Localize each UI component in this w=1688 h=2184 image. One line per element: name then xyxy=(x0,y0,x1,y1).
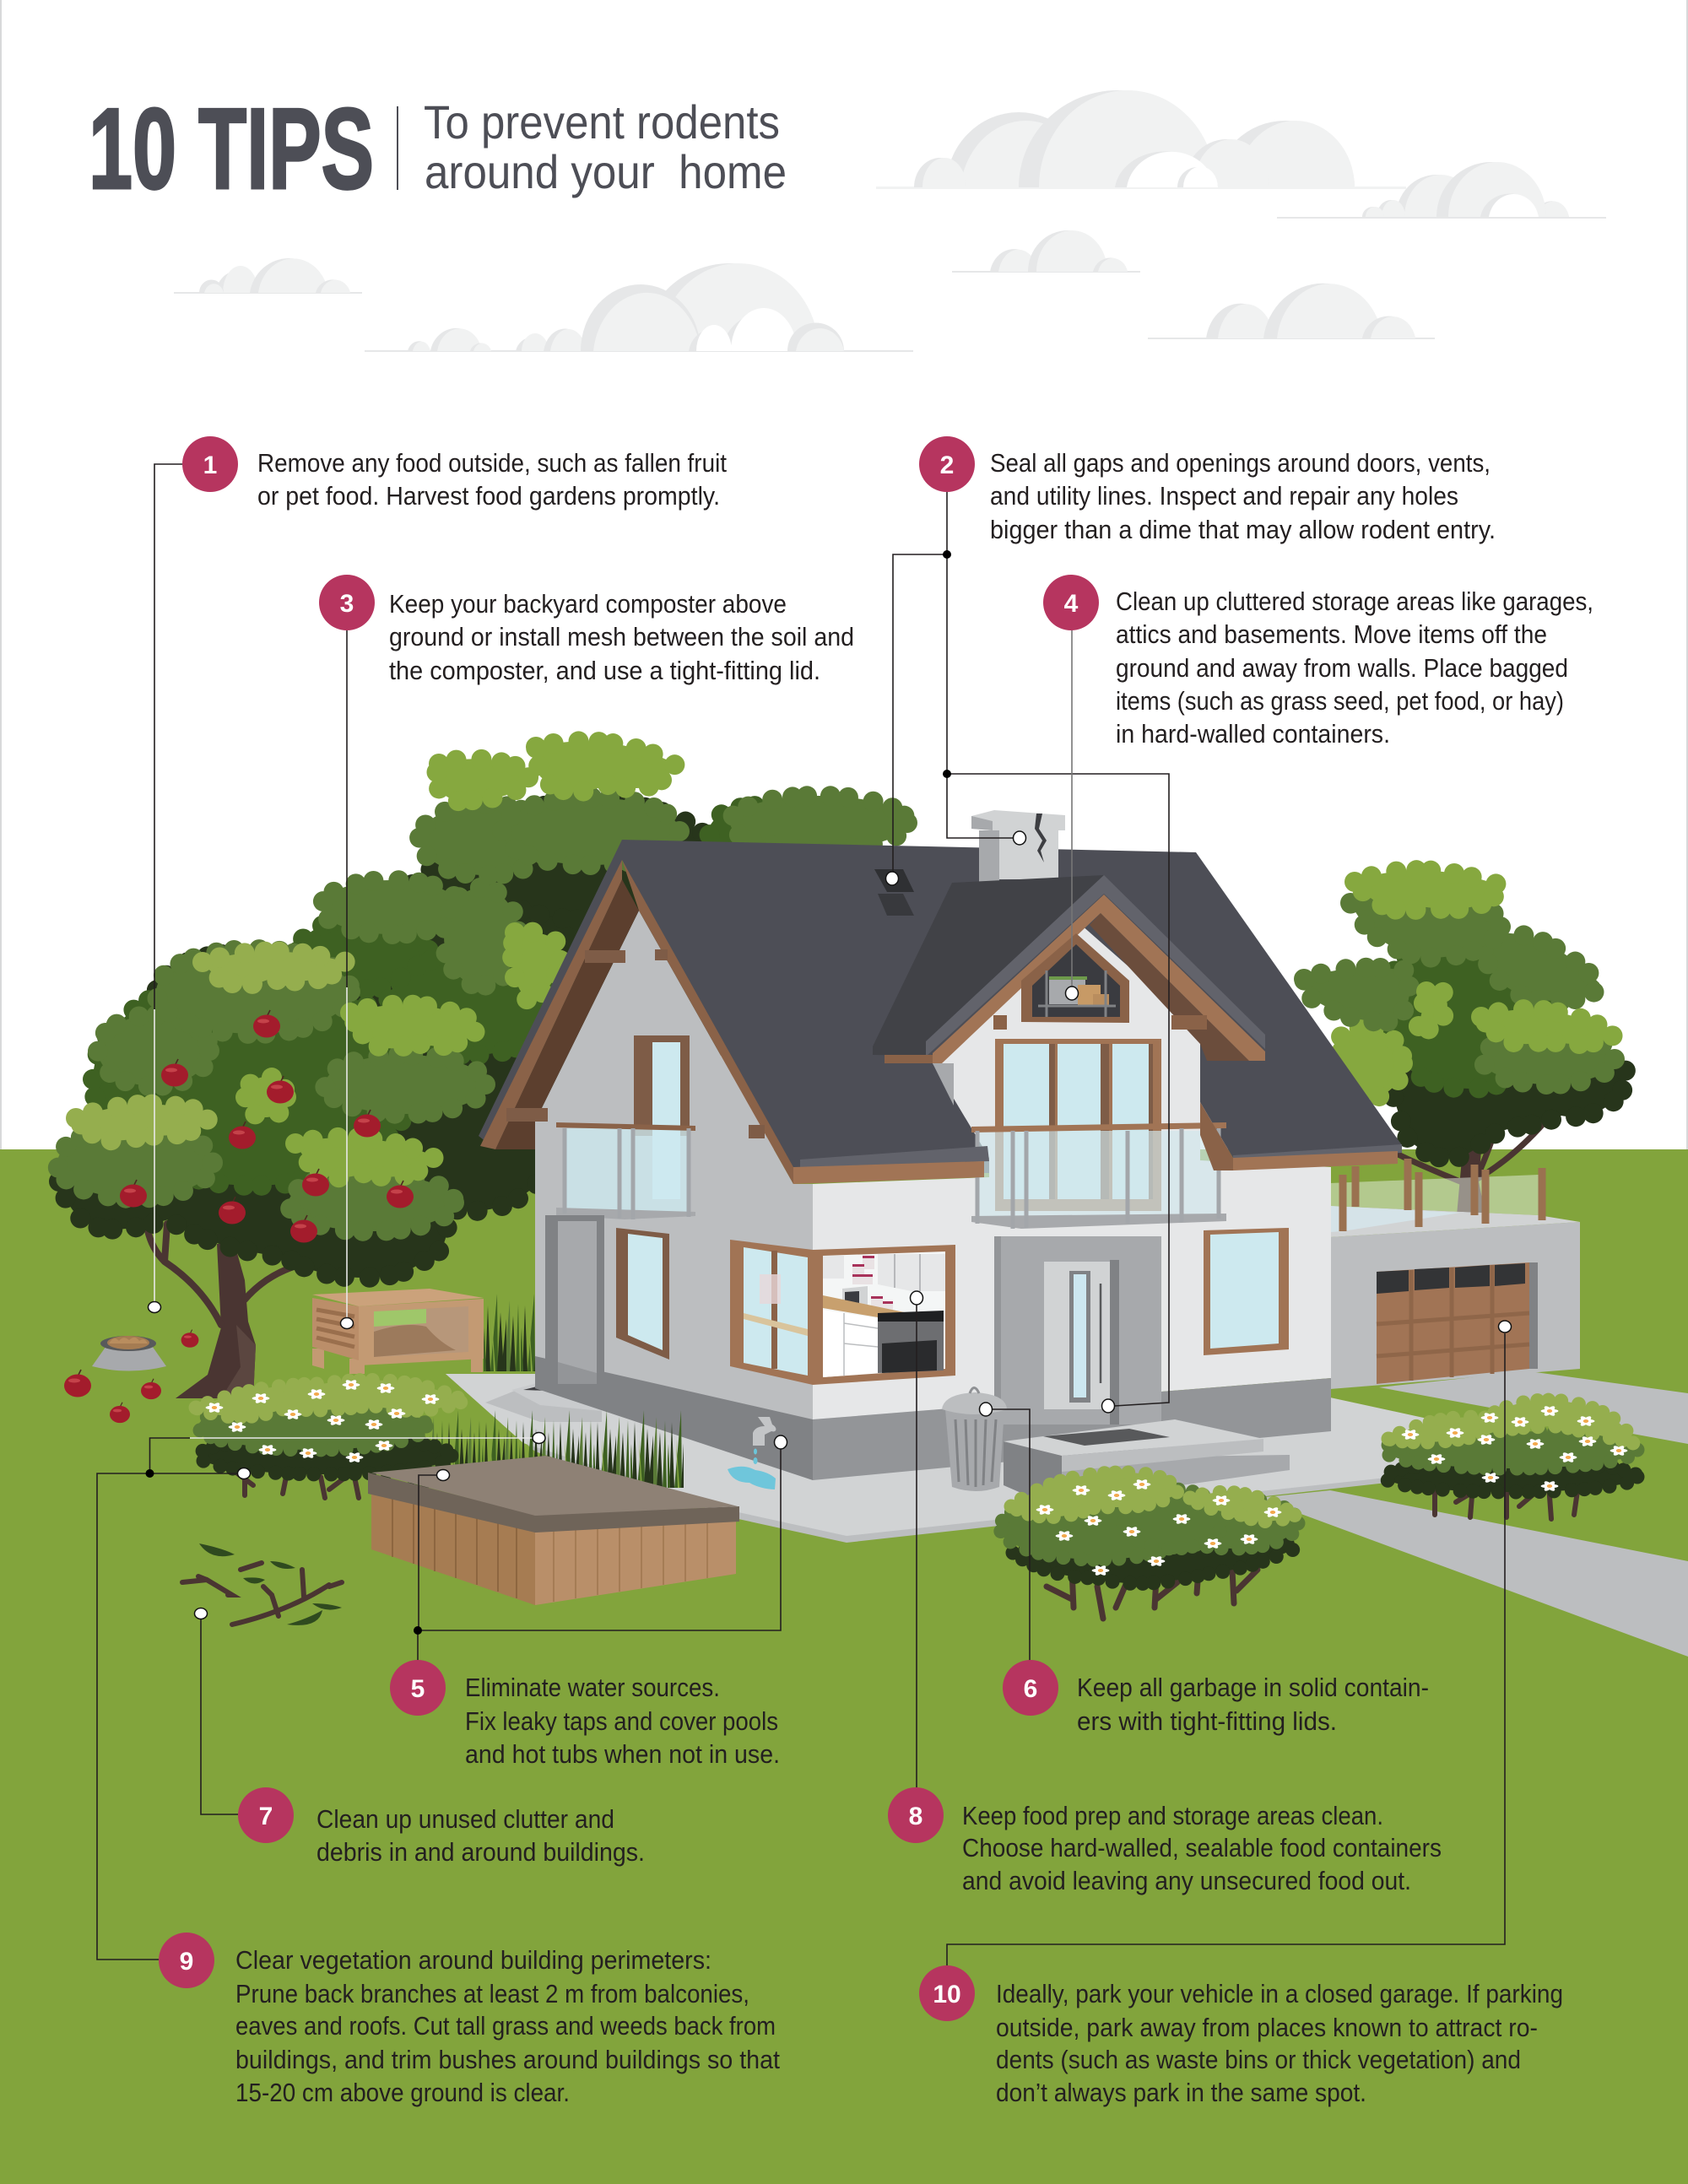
cloud: right xyxy=(1277,162,1606,219)
cloud: center large xyxy=(365,263,913,352)
trunk xyxy=(176,1244,256,1398)
side gable wall xyxy=(535,911,813,1480)
back shrub behind roof xyxy=(709,796,907,857)
tip 6 text xyxy=(1077,1673,1429,1736)
tip 2 text: bigger than a dime that may allow rodent entry. xyxy=(990,515,1496,544)
badge 5 xyxy=(390,1660,446,1716)
tip 3 text xyxy=(389,589,854,685)
tip 4 text: in hard-walled containers. xyxy=(1116,719,1390,749)
connector 6 xyxy=(979,1403,1030,1661)
tip 9 text xyxy=(235,1945,780,2107)
tip 6 xyxy=(1003,1660,1429,1736)
subtitle line 1: To prevent rodents xyxy=(424,95,780,149)
connector 1 xyxy=(149,464,182,1313)
kitchen corner window xyxy=(730,1240,955,1385)
tip 5 xyxy=(390,1660,780,1769)
tip 10 text xyxy=(996,1979,1563,2107)
tip 9 text: 15-20 cm above ground is clear. xyxy=(235,2078,570,2107)
badge 9: 9 xyxy=(180,1948,193,1976)
fallen apples xyxy=(64,1330,198,1423)
oven xyxy=(878,1311,944,1373)
badge 2 xyxy=(919,436,975,492)
title block xyxy=(89,84,787,213)
cloud: lower right xyxy=(1148,284,1435,339)
connector 10 xyxy=(947,1321,1511,1966)
tip 4 text: ground and away from walls. Place bagged xyxy=(1116,653,1568,683)
front wall xyxy=(813,925,1331,1419)
badge 6 xyxy=(1003,1660,1058,1716)
tip 2 text xyxy=(990,448,1496,544)
dormer underside xyxy=(1090,913,1249,1061)
tip 5 text: Fix leaky taps and cover pools xyxy=(465,1706,778,1736)
front entrance xyxy=(994,1236,1161,1424)
clouds xyxy=(174,90,1606,352)
back tree behind house xyxy=(297,741,722,1211)
garage door xyxy=(1377,1262,1538,1384)
counter xyxy=(823,1295,942,1317)
upper left window and balcony xyxy=(556,1035,695,1219)
tip 1 text: or pet food. Harvest food gardens promptly. xyxy=(257,481,720,511)
badge 5: 5 xyxy=(411,1675,425,1703)
tip 10 text: don’t always park in the same spot. xyxy=(996,2078,1366,2107)
apples on tree xyxy=(120,1010,414,1242)
tip 10 text: outside, park away from places known to attract ro- xyxy=(996,2013,1538,2042)
side wall plinth xyxy=(535,1356,813,1480)
badge 7: 7 xyxy=(259,1803,273,1830)
subtitle line 2: around your home xyxy=(425,145,787,198)
apple tree xyxy=(57,949,485,1398)
tip 10 text: dents (such as waste bins or thick vegetation) and xyxy=(996,2045,1521,2074)
badge 2: 2 xyxy=(940,451,954,479)
title divider xyxy=(397,106,398,190)
tip 8 text: Keep food prep and storage areas clean. xyxy=(962,1801,1383,1830)
tip 5 text: Eliminate water sources. xyxy=(465,1673,720,1702)
tip 2 xyxy=(919,436,1496,544)
connector 5 xyxy=(414,1435,787,1661)
garage and terrace xyxy=(1330,1206,1580,1389)
connector 8 xyxy=(910,1291,923,1787)
garage wall xyxy=(1330,1222,1580,1389)
kitchen left pane xyxy=(744,1247,808,1376)
gable roof edge xyxy=(479,840,622,1149)
heading: 10 tips: 10 TIPS xyxy=(89,84,374,213)
tip 4 xyxy=(1043,575,1593,749)
kitchen interior xyxy=(823,1251,945,1377)
roof vent xyxy=(874,869,914,916)
upper french windows xyxy=(995,1039,1161,1211)
upper driveway xyxy=(1379,1371,1688,1444)
right eave xyxy=(1200,1102,1402,1170)
tip 4 text: attics and basements. Move items off the xyxy=(1116,619,1547,649)
tip 10 text: Ideally, park your vehicle in a closed garage. If parking xyxy=(996,1979,1563,2008)
tip 9 text: buildings, and trim bushes around buildings so that xyxy=(235,2045,780,2074)
side door xyxy=(545,1215,604,1400)
terrace railing xyxy=(1330,1159,1542,1231)
tip 9 text: Prune back branches at least 2 m from balconies, xyxy=(235,1979,749,2008)
tip 9 text: Clear vegetation around building perimeters: xyxy=(235,1945,711,1975)
back door steps xyxy=(485,1383,602,1422)
composter xyxy=(312,1289,484,1374)
gable fascia right xyxy=(622,860,793,1184)
tip 6 text: Keep all garbage in solid contain- xyxy=(1077,1673,1429,1702)
badge 3 xyxy=(319,575,375,630)
badge 7 xyxy=(238,1787,294,1843)
side window xyxy=(616,1228,669,1360)
grass in front of house xyxy=(408,1410,684,1488)
house xyxy=(479,810,1402,1511)
badge 10: 10 xyxy=(933,1981,961,2008)
food containers xyxy=(852,1257,893,1311)
background sky xyxy=(0,0,1688,1149)
bush right with flowers xyxy=(1384,1400,1637,1519)
tip 10 xyxy=(919,1965,1563,2107)
bush center with flowers xyxy=(1000,1473,1298,1619)
badge 6: 6 xyxy=(1024,1675,1037,1703)
wall shadow wedge xyxy=(933,1063,954,1106)
composter legs xyxy=(312,1349,483,1374)
right window xyxy=(1204,1228,1289,1355)
badge 1 xyxy=(182,436,238,492)
cloud: center right small xyxy=(952,230,1140,273)
door mat xyxy=(1043,1429,1170,1446)
grass beside house xyxy=(484,1294,535,1371)
tip 7 text: debris in and around buildings. xyxy=(316,1837,645,1867)
badge 1: 1 xyxy=(203,451,217,479)
tip 3 xyxy=(319,575,854,685)
tip 6 text: ers with tight-fitting lids. xyxy=(1077,1706,1337,1736)
dormer fascia xyxy=(933,895,1265,1063)
composter mesh xyxy=(374,1306,468,1357)
tip 1 xyxy=(182,436,727,511)
tip 4 text xyxy=(1116,587,1593,749)
connector 2 xyxy=(886,492,1169,1413)
tip 8 text xyxy=(962,1801,1442,1895)
water tap xyxy=(753,1417,776,1464)
hot tub xyxy=(368,1456,739,1605)
foliage xyxy=(59,1122,447,1278)
page edge lines xyxy=(1,0,1687,1149)
gable soffit xyxy=(495,879,639,1149)
debris branches and leaves xyxy=(182,1543,342,1625)
trash can xyxy=(942,1387,1007,1491)
badge 4 xyxy=(1043,575,1099,630)
tip 3 text: ground or install mesh between the soil and xyxy=(389,622,854,651)
gable beams xyxy=(506,949,765,1138)
tip 4 text: items (such as grass seed, pet food, or hay) xyxy=(1116,686,1564,716)
microwave xyxy=(842,1286,868,1308)
tip 9 text: eaves and roofs. Cut tall grass and weeds back from xyxy=(235,2011,776,2041)
tip 3 text: Keep your backyard composter above xyxy=(389,589,787,619)
tip 2 text: Seal all gaps and openings around doors, vents, xyxy=(990,448,1491,478)
tip 7 text xyxy=(316,1804,645,1867)
tip 7 text: Clean up unused clutter and xyxy=(316,1804,614,1834)
connector lines and anchors xyxy=(97,464,1511,1966)
tip 1 text: Remove any food outside, such as fallen fruit xyxy=(257,448,727,478)
front eave xyxy=(793,1146,989,1184)
connector 7 xyxy=(194,1608,238,1814)
background lawn xyxy=(0,1149,1688,2184)
tip 8 text: Choose hard-walled, sealable food containers xyxy=(962,1833,1442,1862)
tip 9 xyxy=(159,1933,780,2107)
dormer roof xyxy=(873,875,1104,1056)
connector 4 xyxy=(1065,630,1079,1000)
tip 3 text: the composter, and use a tight-fitting lid. xyxy=(389,656,820,685)
upper balcony xyxy=(971,1122,1226,1229)
front plinth xyxy=(813,1378,1331,1480)
cloud: left small xyxy=(174,258,362,294)
cloud: upper right large xyxy=(876,90,1406,189)
badge 4: 4 xyxy=(1064,590,1079,618)
terrace floor xyxy=(1330,1206,1580,1237)
tip 1 text xyxy=(257,448,727,511)
water puddle xyxy=(728,1467,776,1489)
chimney crack xyxy=(1035,814,1047,862)
badge 10 xyxy=(919,1965,975,2021)
badge 9 xyxy=(159,1933,214,1988)
badge 3: 3 xyxy=(340,590,354,618)
connector 3 xyxy=(341,630,353,1328)
connector 9 xyxy=(97,1433,545,1960)
gable fascia left xyxy=(480,860,622,1149)
tip 4 text: Clean up cluttered storage areas like garages, xyxy=(1116,587,1593,616)
dormer roof edge xyxy=(926,875,1265,1057)
chimney xyxy=(971,810,1065,882)
tip 5 text: and hot tubs when not in use. xyxy=(465,1739,780,1769)
pet food bowl xyxy=(92,1336,166,1370)
dormer beams xyxy=(885,1015,1207,1063)
tip 5 text xyxy=(465,1673,780,1769)
tip 8 xyxy=(888,1787,1442,1895)
patio slab xyxy=(446,1374,1485,1536)
front steps xyxy=(1004,1419,1290,1511)
badge 8 xyxy=(888,1787,944,1843)
tip 7 xyxy=(238,1787,645,1867)
tip 2 text: and utility lines. Inspect and repair any holes xyxy=(990,481,1458,511)
patio slab edge xyxy=(446,1374,1485,1543)
attic window with storage xyxy=(1021,933,1129,1023)
lower driveway xyxy=(1258,1490,1688,1657)
right tree xyxy=(1304,870,1626,1215)
badge 8: 8 xyxy=(909,1803,922,1830)
bush left with flowers xyxy=(196,1379,464,1498)
tip 8 text: and avoid leaving any unsecured food out. xyxy=(962,1866,1411,1895)
main roof xyxy=(622,840,1402,1173)
